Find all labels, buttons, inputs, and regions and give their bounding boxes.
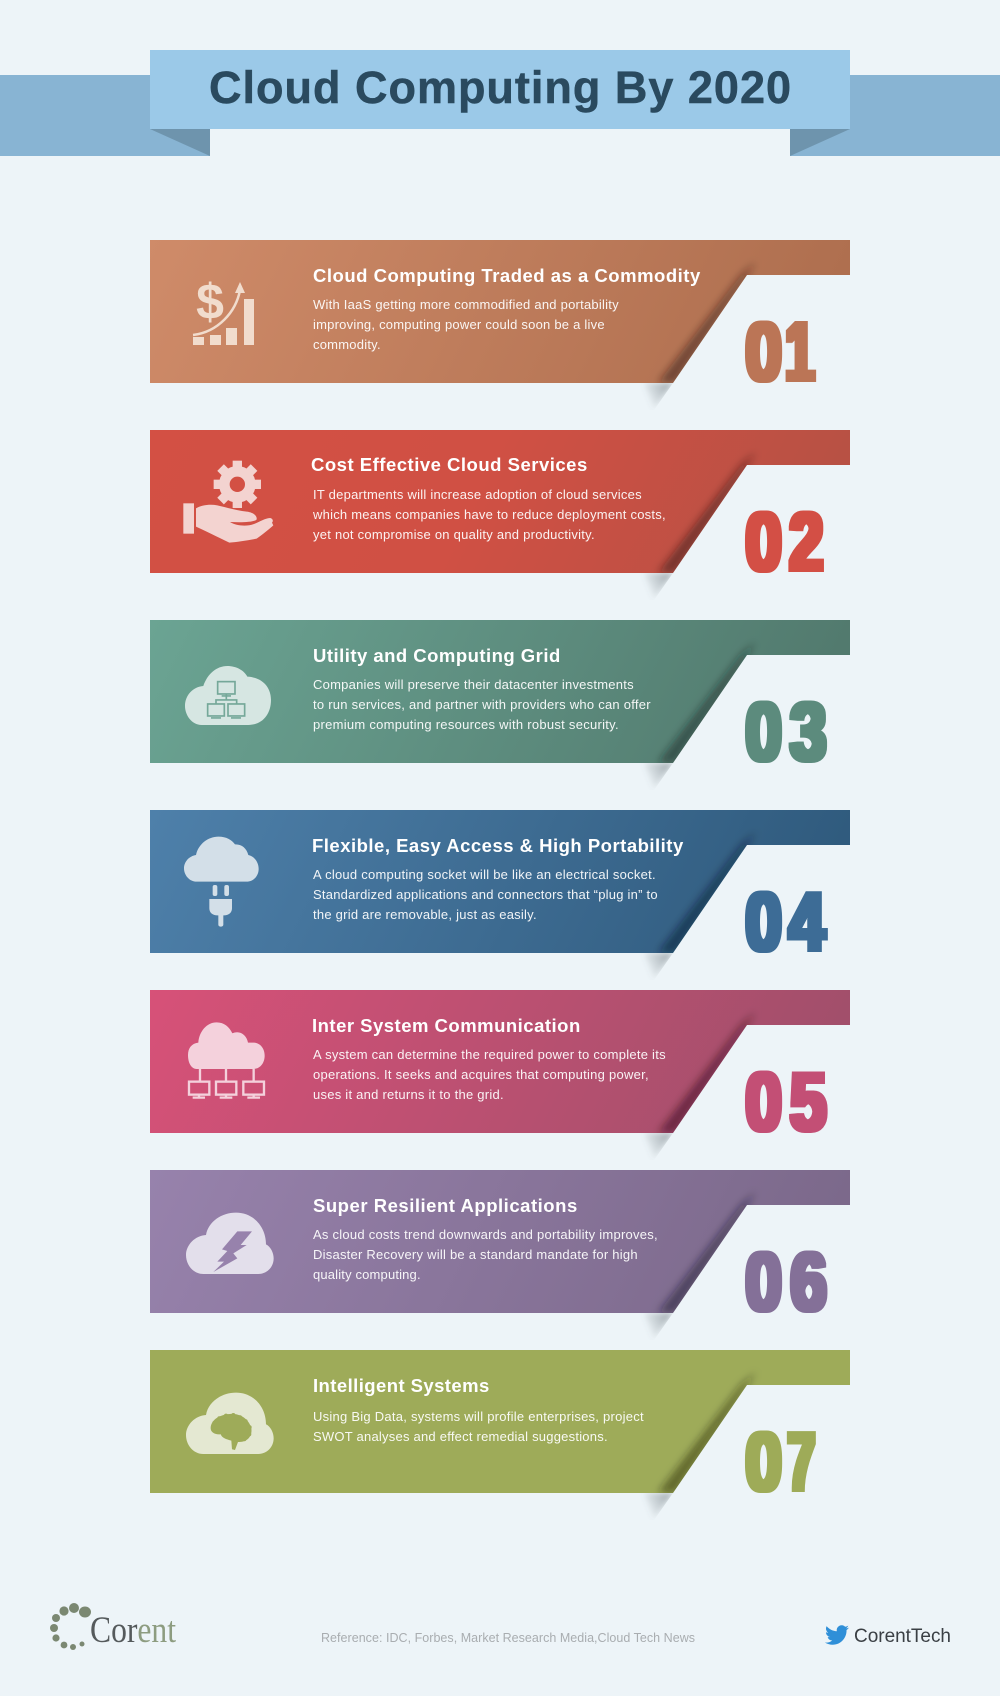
body text	[312, 487, 666, 542]
icon: cloud with brain	[186, 1393, 274, 1454]
icon: cloud with lightning	[186, 1213, 274, 1274]
panel 04: flexible access	[150, 810, 850, 980]
number 03: 3	[790, 685, 826, 778]
number 03	[745, 685, 826, 778]
panel 06: super resilient	[150, 1170, 850, 1340]
body text: SWOT analyses and effect remedial suggestions.	[313, 1429, 608, 1444]
body text: A cloud computing socket will be like an electrical socket.	[313, 867, 656, 882]
logo: Corent	[50, 1603, 177, 1651]
number 04: 4	[789, 875, 826, 968]
heading: Inter System Communication	[312, 1015, 581, 1036]
body text: yet not compromise on quality and productivity.	[313, 527, 595, 542]
logo: Corent: Corent	[90, 1610, 177, 1651]
number 01: 1	[785, 305, 815, 398]
number 06: 6	[790, 1235, 827, 1328]
body text	[313, 297, 619, 352]
body text: operations. It seeks and acquires that computing power,	[313, 1067, 649, 1082]
body text	[313, 867, 658, 922]
heading: Super Resilient Applications	[313, 1195, 578, 1216]
panel 05: inter system communication	[150, 990, 850, 1160]
number 06: 0	[745, 1235, 782, 1328]
body text: Disaster Recovery will be a standard mandate for high	[313, 1247, 638, 1262]
heading: Intelligent Systems	[313, 1375, 490, 1396]
body text: IT departments will increase adoption of cloud services	[313, 487, 642, 502]
number 02: 2	[789, 496, 823, 588]
panel 01: commodity	[150, 240, 850, 410]
heading: Cost Effective Cloud Services	[311, 454, 588, 475]
body text: which means companies have to reduce deployment costs,	[312, 507, 666, 522]
heading: Cloud Computing Traded as a Commodity	[313, 265, 701, 286]
body text: quality computing.	[313, 1267, 421, 1282]
body text: improving, computing power could soon be a live	[313, 317, 605, 332]
reference note: Reference: IDC, Forbes, Market Research Media,Cloud Tech News	[321, 1631, 695, 1645]
icon: dollar and rising chart: $	[196, 274, 224, 330]
body text	[313, 1227, 658, 1282]
icon: cloud with plug	[184, 837, 259, 927]
icon: cloud with network	[185, 666, 271, 725]
body text	[313, 677, 651, 732]
number 06	[745, 1235, 827, 1328]
body text: Using Big Data, systems will profile enterprises, project	[313, 1409, 644, 1424]
body text: uses it and returns it to the grid.	[313, 1087, 504, 1102]
number 07	[745, 1415, 815, 1508]
number 02	[745, 495, 823, 588]
icon: cloud with three computers	[188, 1022, 265, 1098]
body text: commodity.	[313, 337, 381, 352]
body text: As cloud costs trend downwards and portability improves,	[313, 1227, 658, 1242]
title: Cloud Computing By 2020	[209, 62, 791, 113]
heading: Utility and Computing Grid	[313, 645, 561, 666]
number 04: 0	[745, 875, 782, 968]
panel 02: cost effective	[150, 430, 850, 600]
icon: dollar and rising chart	[193, 274, 254, 345]
number 05: 5	[790, 1055, 826, 1148]
number 05	[745, 1055, 826, 1148]
title banner	[0, 50, 1000, 156]
body text: Companies will preserve their datacenter investments	[313, 677, 634, 692]
body text: A system can determine the required power to complete its	[313, 1047, 666, 1062]
number 02: 0	[745, 495, 782, 588]
panel 03: utility grid	[150, 620, 850, 790]
number 01	[745, 305, 815, 398]
number 05: 0	[745, 1055, 782, 1148]
body text: to run services, and partner with providers who can offer	[313, 697, 651, 712]
body text: With IaaS getting more commodified and portability	[313, 297, 619, 312]
number 07: 7	[788, 1416, 815, 1508]
body text: the grid are removable, just as easily.	[313, 907, 537, 922]
number 04	[745, 875, 826, 968]
heading: Flexible, Easy Access & High Portability	[312, 835, 684, 856]
number 01: 0	[745, 305, 782, 398]
number 07: 0	[745, 1415, 782, 1508]
number 03: 0	[745, 685, 782, 778]
twitter handle: CorentTech	[854, 1626, 951, 1647]
icon: hand holding gear	[183, 461, 273, 543]
body text: premium computing resources with robust security.	[313, 717, 619, 732]
body text: Standardized applications and connectors that “plug in” to	[313, 887, 658, 902]
body text	[313, 1047, 666, 1102]
icon: twitter bird	[825, 1625, 849, 1645]
body text	[313, 1409, 644, 1444]
panel 07: intelligent systems	[150, 1350, 850, 1520]
